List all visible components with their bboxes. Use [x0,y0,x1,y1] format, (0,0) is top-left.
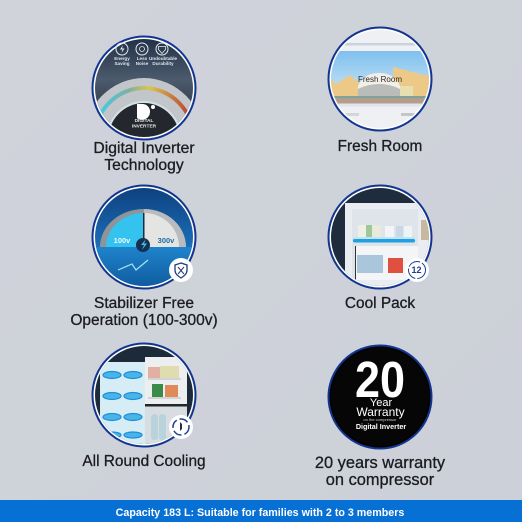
icon: digital inverter badge: Durability [152,61,174,66]
icon: digital inverter badge: Energy [114,56,130,61]
icon: freezer with cool pack: 12 [411,265,422,275]
heading: digital inverter technology: Digital Inverter [93,140,195,157]
panel: 20 years warranty [315,346,446,489]
icon: digital inverter badge: Noise [136,61,149,66]
heading: stabilizer free operation: Operation (100-300v) [70,312,218,329]
icon: warranty badge: on the compressor [363,417,397,422]
panel: stabilizer free operation [70,185,218,329]
icon: warranty badge: Year [370,397,392,409]
icon: digital inverter badge: DIGITAL [135,118,153,124]
heading: 20 years warranty: on compressor [326,471,435,489]
icon: voltage gauge: 300v [158,236,175,245]
icon: digital inverter badge: Undoubtable [149,56,177,61]
heading: all round cooling: All Round Cooling [82,453,206,470]
panel: all round cooling [82,343,206,470]
icon: digital inverter badge: Less [137,56,148,61]
icon: warranty badge: Digital Inverter [356,422,406,431]
icon: digital inverter badge: Saving [114,61,130,66]
heading: digital inverter technology: Technology [104,157,184,174]
icon: fridge interior cooling [92,343,196,452]
icon: warranty badge [328,346,432,448]
icon: voltage gauge [92,185,196,289]
heading: cool pack: Cool Pack [345,295,415,312]
icon: voltage gauge: 100v [114,236,131,245]
footer text: Capacity 183 L: Suitable for families with 2 to 3 members [116,507,404,519]
footer banner [0,500,522,522]
icon: digital inverter badge: INVERTER [132,124,157,130]
heading: stabilizer free operation: Stabilizer Free [94,295,194,312]
icon: fresh room shelf: Fresh Room [358,75,402,84]
icon: warranty badge: 20 [355,351,405,408]
heading: fresh room: Fresh Room [338,138,422,155]
panel: fresh room [328,27,432,155]
icon: digital inverter badge [92,36,196,140]
heading: 20 years warranty: 20 years warranty [315,454,446,472]
panel: cool pack [328,185,435,312]
icon: warranty badge: Warranty [356,405,405,419]
panel: digital inverter technology [92,36,196,174]
